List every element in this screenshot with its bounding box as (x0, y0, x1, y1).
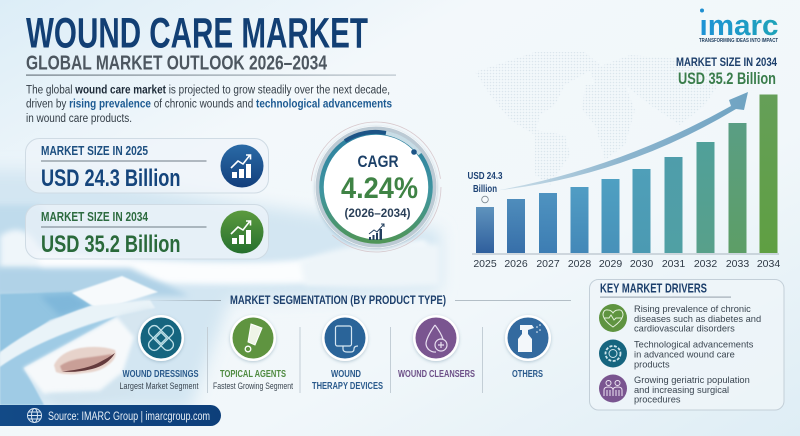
card: market size 2025: USD 24.3 Billion (41, 165, 180, 192)
icon: spray bottle (518, 324, 541, 352)
logo: imarc: ımarc (700, 10, 778, 42)
bar chart: 2025 (473, 258, 497, 270)
segment: wound therapy devices: WOUND (331, 369, 361, 380)
intro paragraph (26, 84, 392, 125)
driver: technological advancements: in advanced wound care (634, 350, 735, 360)
icon: growth chart blue (220, 144, 264, 188)
driver: chronic diseases: cardiovascular disorders (634, 324, 735, 334)
icon: growth chart green (220, 210, 264, 254)
source bar (0, 405, 221, 426)
gauze pad (23, 317, 134, 394)
chart callout: market size 2034 (676, 57, 777, 88)
bar chart: 2026 (504, 258, 528, 270)
bar chart: 2033 (726, 258, 749, 270)
intro paragraph: in wound care products. (26, 113, 132, 125)
CAGR badge: 4.24% (341, 172, 418, 205)
driver: technological advancements: Technological advancements (634, 340, 754, 350)
icon: small chart (369, 224, 384, 240)
card: market size 2025: MARKET SIZE IN 2025 (41, 144, 148, 158)
icon: water drop (426, 325, 447, 352)
driver: chronic diseases: diseases such as diabetes and (634, 314, 761, 324)
title: WOUND CARE MARKET (26, 10, 368, 58)
CAGR badge (311, 122, 441, 252)
subtitle: GLOBAL MARKET OUTLOOK 2026–2034 (26, 52, 328, 74)
segment: topical agents: TOPICAL AGENTS (220, 369, 286, 380)
bar chart: 2028 (568, 258, 591, 270)
segment: topical agents: Fastest Growing Segment (213, 381, 293, 391)
segment: wound dressings: WOUND DRESSINGS (122, 369, 199, 380)
segmentation heading: MARKET SEGMENTATION (BY PRODUCT TYPE) (230, 293, 446, 307)
bar chart: 2027 (536, 258, 560, 270)
source bar: Source: IMARC Group | imarcgroup.com (48, 411, 210, 423)
driver: chronic diseases: Rising prevalence of chronic (634, 304, 751, 314)
CAGR badge: (2026–2034) (344, 206, 410, 220)
segment: wound therapy devices: THERAPY DEVICES (312, 381, 383, 392)
segment: topical agents (213, 315, 293, 391)
logo: imarc: TRANSFORMING IDEAS INTO IMPACT (699, 38, 778, 44)
driver: chronic diseases (599, 304, 761, 334)
card: market size 2034: MARKET SIZE IN 2034 (41, 210, 148, 224)
bar chart: 2031 (662, 258, 685, 270)
driver: geriatric population: procedures (634, 394, 681, 404)
segment: others (505, 315, 551, 380)
intro paragraph: The global wound care market is projected to grow steadily over the next decade, (26, 84, 390, 96)
card: market size 2025 (26, 138, 268, 193)
segment: wound dressings: Largest Market Segment (120, 381, 199, 391)
segment: wound therapy devices (312, 315, 383, 392)
bar chart: 2029 (599, 258, 622, 270)
driver: geriatric population: and increasing surgical (634, 385, 729, 395)
chart callout: market size 2034: MARKET SIZE IN 2034 (676, 57, 777, 69)
chart callout: usd 24.3 billion: Billion (473, 183, 497, 195)
chart callout: usd 24.3 billion (468, 170, 503, 203)
segment: wound dressings (120, 315, 199, 391)
bar chart: 2030 (630, 258, 653, 270)
driver: technological advancements (599, 340, 754, 370)
driver: geriatric population: Growing geriatric population (634, 375, 750, 385)
intro paragraph: driven by rising prevalence of chronic wounds and technological advancements (26, 98, 392, 110)
icon: crossed bandages (147, 324, 175, 352)
icon: ointment tube (245, 324, 262, 352)
CAGR badge: CAGR (358, 152, 398, 171)
icon: globe (28, 408, 42, 422)
bar chart: 2032 (694, 258, 717, 270)
segment: wound cleansers: WOUND CLEANSERS (398, 369, 475, 380)
card: market size 2034: USD 35.2 Billion (41, 231, 180, 258)
tape strip (72, 276, 158, 310)
photo: medical dressing and wound (0, 170, 440, 410)
panel: key market drivers: KEY MARKET DRIVERS (600, 282, 707, 296)
icon: therapy device (336, 326, 358, 352)
bar chart (472, 94, 780, 270)
chart callout: usd 24.3 billion: USD 24.3 (468, 170, 503, 182)
growth arrow (497, 92, 748, 190)
wound (54, 347, 116, 374)
bar chart: 2034 (757, 258, 780, 270)
segment: others: OTHERS (512, 369, 543, 380)
driver: technological advancements: products (634, 360, 670, 370)
segment: wound cleansers (398, 315, 475, 380)
panel: key market drivers (590, 280, 784, 410)
card: market size 2034 (26, 204, 268, 259)
world map dotted (475, 52, 725, 185)
driver: geriatric population (599, 374, 750, 404)
